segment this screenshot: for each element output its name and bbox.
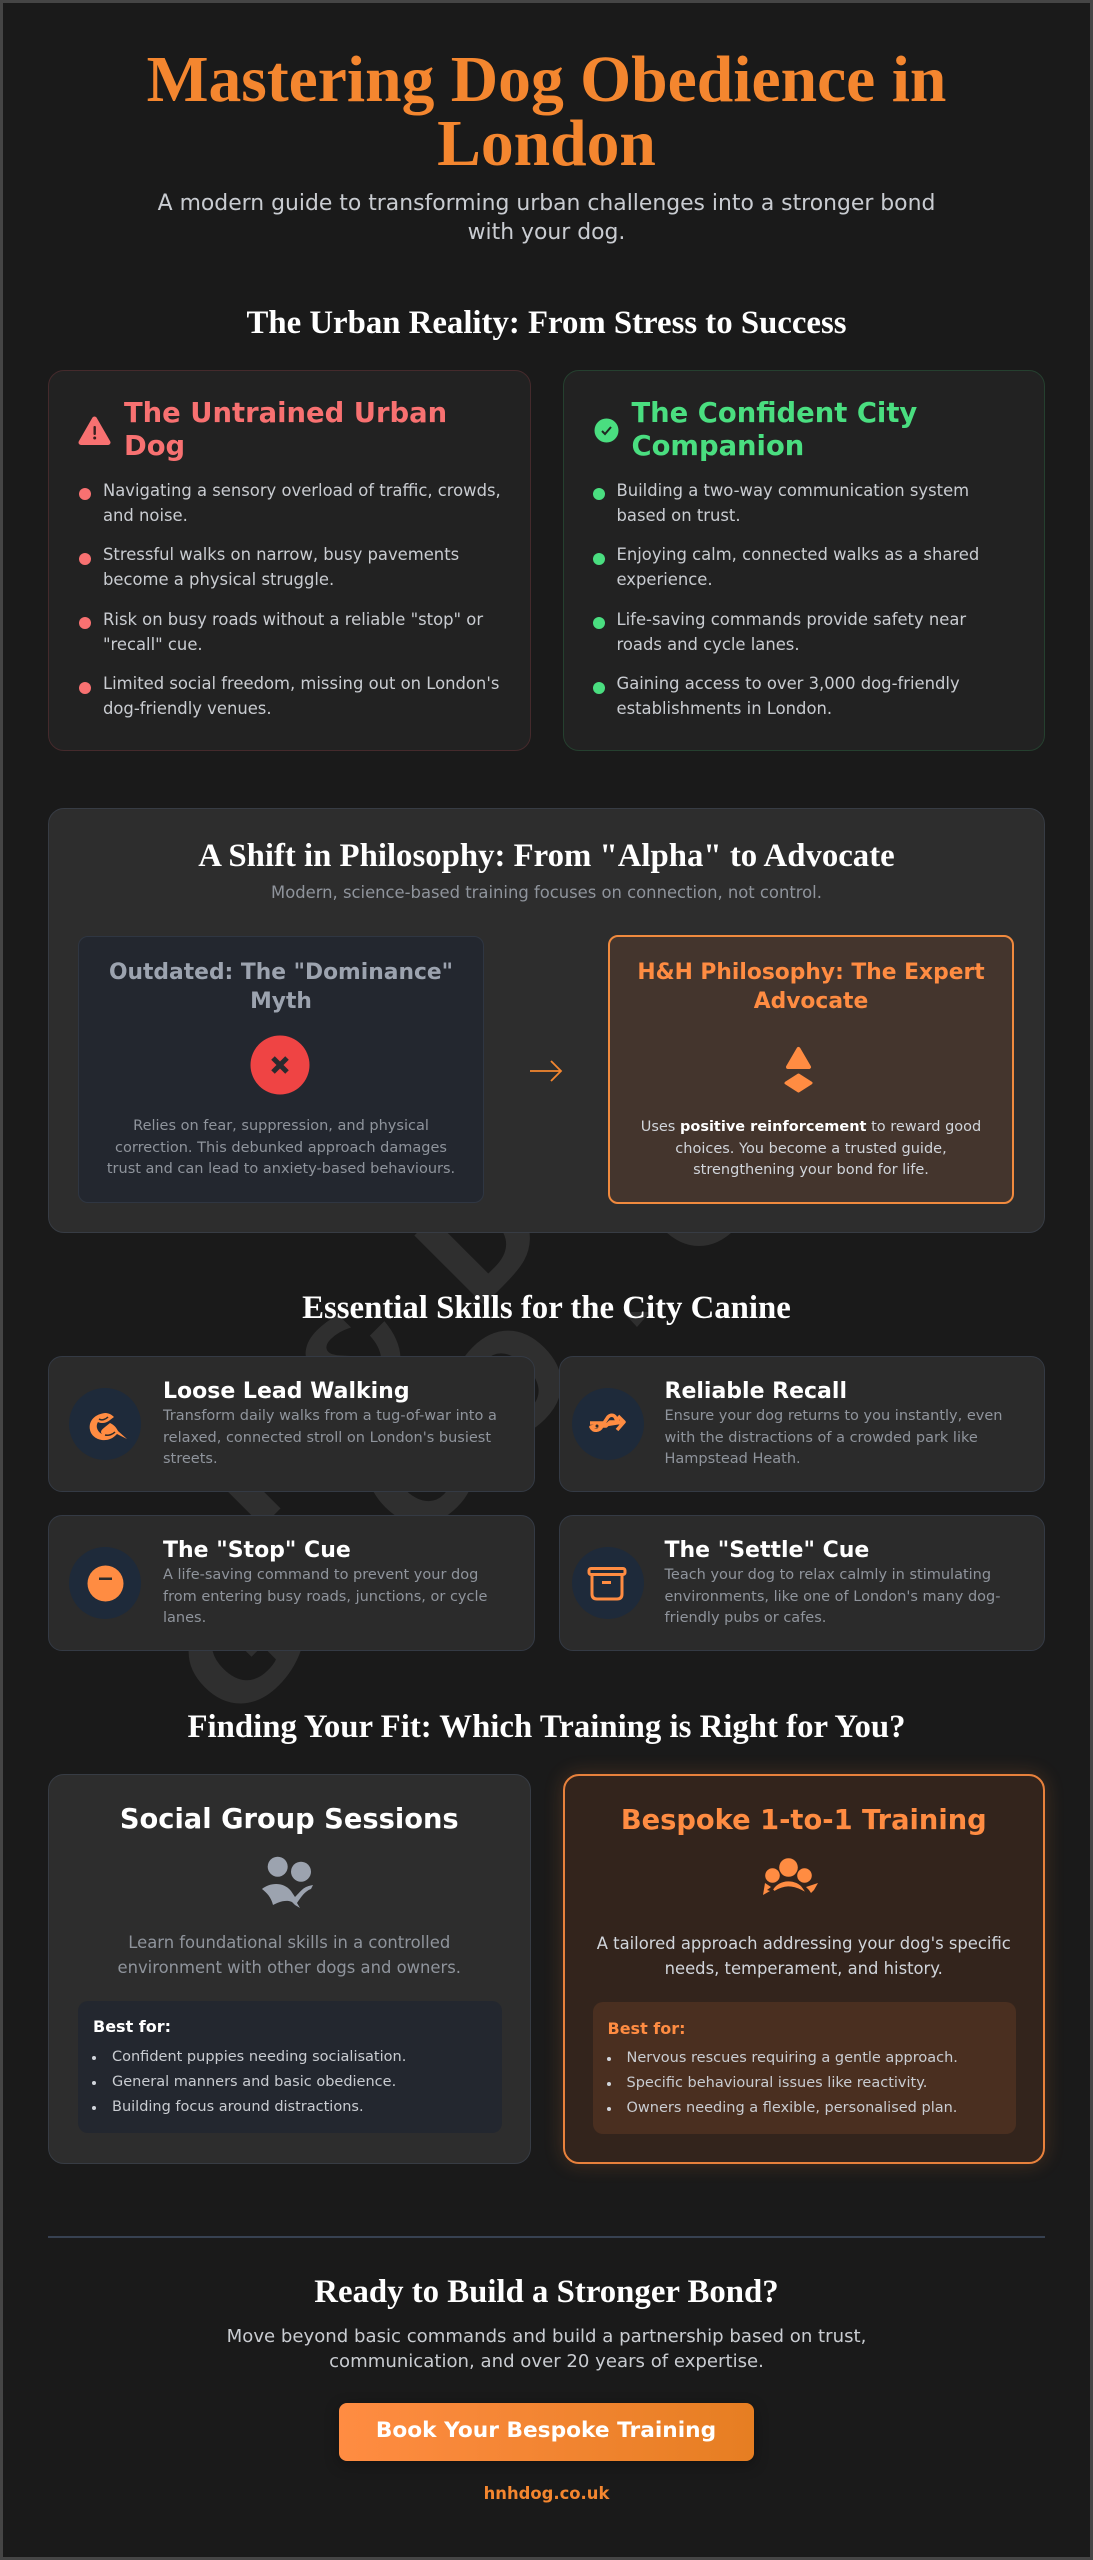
box text: trust and can lead to anxiety-based behaviours. xyxy=(107,1161,455,1177)
card heading: Companion xyxy=(632,431,804,462)
icon: stop xyxy=(88,1566,124,1602)
skill description: Teach your dog to relax calmly in stimulating xyxy=(664,1567,991,1583)
skill description xyxy=(664,1567,1000,1626)
heading: ready: Ready to Build a Stronger Bond? xyxy=(314,2274,779,2310)
box heading: Myth xyxy=(250,989,312,1014)
subtitle xyxy=(158,191,935,245)
skill description xyxy=(163,1567,487,1626)
skill description: relaxed, connected stroll on London's busiest xyxy=(163,1430,491,1446)
skill name: The "Stop" Cue xyxy=(163,1538,351,1563)
icon circle xyxy=(572,1388,644,1460)
title: Mastering Dog Obedience in xyxy=(147,44,946,116)
skill description: Ensure your dog returns to you instantly, even xyxy=(664,1408,1002,1424)
skill description: lanes. xyxy=(163,1610,206,1626)
bullet xyxy=(606,2082,610,2086)
heading: finding your fit: Finding Your Fit: Which Training is Right for You? xyxy=(187,1709,906,1745)
card heading xyxy=(124,398,447,462)
list text: Navigating a sensory overload of traffic, crowds, xyxy=(103,481,501,500)
watermark: & xyxy=(262,1267,456,1462)
list text xyxy=(103,481,501,525)
icon: check circle xyxy=(594,418,618,442)
box heading: H&H Philosophy: The Expert xyxy=(637,960,985,985)
icon circle xyxy=(69,1388,141,1460)
list text: Building a two-way communication system xyxy=(616,481,969,500)
skill name: The "Settle" Cue xyxy=(664,1538,869,1563)
best for label: Best for: xyxy=(93,2017,171,2036)
list item xyxy=(79,553,91,565)
watermark: O xyxy=(327,1377,519,1569)
card: stop cue xyxy=(48,1515,534,1651)
card text: needs, temperament, and history. xyxy=(665,1959,943,1978)
icon: group of dogs xyxy=(262,1856,313,1908)
card heading: The Confident City xyxy=(632,398,917,429)
card text: Learn foundational skills in a controlled xyxy=(128,1933,450,1952)
skill description: streets. xyxy=(163,1451,218,1467)
title xyxy=(147,44,946,180)
panel: untrained dog xyxy=(48,370,530,751)
icon: lead xyxy=(90,1413,127,1440)
list text xyxy=(616,481,969,525)
bullet text: Building focus around distractions. xyxy=(112,2099,364,2115)
box text: choices. You become a trusted guide, xyxy=(675,1141,947,1157)
bullet xyxy=(92,2081,96,2085)
footer divider xyxy=(48,2236,1045,2238)
card text xyxy=(596,1934,1011,1978)
website link: hnhdog.co.uk xyxy=(484,2484,609,2503)
closing text xyxy=(227,2326,866,2372)
skill description: A life-saving command to prevent your dog xyxy=(163,1567,478,1583)
bullet xyxy=(92,2106,96,2110)
heading: skills: Essential Skills for the City Canine xyxy=(302,1290,791,1326)
icon circle xyxy=(69,1547,141,1619)
button: Book Your Bespoke Training xyxy=(376,2418,716,2443)
bullet xyxy=(606,2107,610,2111)
list item xyxy=(592,488,604,500)
best for box xyxy=(78,2001,502,2133)
bullet text: Nervous rescues requiring a gentle approach. xyxy=(626,2050,958,2066)
list text: Risk on busy roads without a reliable "stop" or xyxy=(103,610,483,629)
list text: "recall" cue. xyxy=(103,635,203,654)
box heading: Advocate xyxy=(754,989,868,1014)
watermark: O xyxy=(414,1289,607,1481)
list text: dog-friendly venues. xyxy=(103,699,272,718)
list text xyxy=(103,674,499,718)
list text: Limited social freedom, missing out on London's xyxy=(103,674,499,693)
card heading: Social Group Sessions xyxy=(120,1804,459,1835)
bullet text: Confident puppies needing socialisation. xyxy=(112,2049,406,2065)
list item xyxy=(79,617,91,629)
subtitle: with your dog. xyxy=(468,220,625,245)
title: London xyxy=(437,108,656,180)
list text: establishments in London. xyxy=(616,699,832,718)
bullet text: General manners and basic obedience. xyxy=(112,2074,396,2090)
card: settle cue xyxy=(558,1515,1045,1651)
panel: expert advocate xyxy=(608,935,1014,1204)
list text: based on trust. xyxy=(616,506,741,525)
list text xyxy=(616,610,966,654)
watermark: O xyxy=(605,1099,797,1291)
icon: box xyxy=(588,1567,626,1600)
skill description xyxy=(162,1408,497,1467)
box text: strengthening your bond for life. xyxy=(693,1162,929,1178)
skill description: Transform daily walks from a tug-of-war into a xyxy=(163,1408,497,1424)
watermark: H xyxy=(165,1367,356,1558)
bullet text: Specific behavioural issues like reactivity. xyxy=(626,2075,927,2091)
button xyxy=(338,2403,754,2461)
subtitle: A modern guide to transforming urban challenges into a stronger bond xyxy=(158,191,935,216)
list text: Enjoying calm, connected walks as a shared xyxy=(616,545,979,564)
best for label: Best for: xyxy=(608,2019,686,2038)
panel: confident companion xyxy=(562,370,1045,751)
skill description xyxy=(664,1408,1002,1467)
skill description: Hampstead Heath. xyxy=(664,1451,801,1467)
card heading: The Untrained Urban xyxy=(124,398,447,429)
icon: warning triangle xyxy=(78,416,110,445)
heading: philosophy: A Shift in Philosophy: From "Alpha" to Advocate xyxy=(198,838,895,874)
list text: Gaining access to over 3,000 dog-friendly xyxy=(616,674,960,693)
skill name: Reliable Recall xyxy=(664,1379,847,1404)
panel: philosophy xyxy=(48,808,1045,1233)
list text: Stressful walks on narrow, busy pavements xyxy=(103,545,459,564)
card heading xyxy=(632,398,917,462)
watermark: D xyxy=(387,1146,577,1336)
box text: correction. This debunked approach damages xyxy=(115,1140,447,1156)
list item xyxy=(592,682,604,694)
skill name: Loose Lead Walking xyxy=(163,1379,410,1404)
panel: outdated dominance myth xyxy=(78,936,484,1203)
icon: red cross xyxy=(250,1036,310,1094)
icon: advocate xyxy=(784,1046,813,1092)
closing text: communication, and over 20 years of expertise. xyxy=(329,2351,764,2372)
closing text: Move beyond basic commands and build a partnership based on trust, xyxy=(227,2326,866,2347)
box heading: Outdated: The "Dominance" xyxy=(109,960,453,985)
skill description: environments, like one of London's many dog- xyxy=(664,1589,1000,1605)
list text: become a physical struggle. xyxy=(103,570,334,589)
card text: environment with other dogs and owners. xyxy=(118,1958,461,1977)
list text: experience. xyxy=(616,570,713,589)
list text: roads and cycle lanes. xyxy=(616,635,800,654)
list item xyxy=(592,617,604,629)
box heading xyxy=(637,960,985,1014)
watermark: G xyxy=(146,1560,336,1749)
list item xyxy=(592,553,604,565)
list text xyxy=(616,545,979,589)
list item xyxy=(79,682,91,694)
box text xyxy=(641,1119,981,1178)
bullet text: Owners needing a flexible, personalised plan. xyxy=(626,2100,957,2116)
card heading: Dog xyxy=(124,431,185,462)
panel: bespoke training xyxy=(562,1774,1045,2164)
list text: and noise. xyxy=(103,506,188,525)
list text xyxy=(103,610,484,654)
best for box xyxy=(592,2002,1016,2134)
philosophy subtitle: Modern, science-based training focuses on connection, not control. xyxy=(271,883,822,902)
list text xyxy=(616,674,960,718)
card text: A tailored approach addressing your dog's specific xyxy=(597,1934,1011,1953)
card text xyxy=(118,1933,461,1977)
box text: Uses positive reinforcement to reward good xyxy=(641,1119,981,1135)
list text xyxy=(103,545,459,589)
box heading xyxy=(109,960,453,1014)
box text: Relies on fear, suppression, and physical xyxy=(133,1118,429,1134)
box text xyxy=(107,1118,455,1177)
heading: urban reality: The Urban Reality: From Stress to Success xyxy=(246,305,847,341)
skill description: friendly pubs or cafes. xyxy=(664,1610,826,1626)
bullet xyxy=(606,2057,610,2061)
panel: social group sessions xyxy=(48,1774,530,2164)
card: reliable recall xyxy=(558,1356,1045,1492)
arrow xyxy=(530,1060,562,1082)
skill description: from entering busy roads, junctions, or cycle xyxy=(163,1589,487,1605)
card: loose lead walking xyxy=(48,1356,534,1492)
icon: recall xyxy=(589,1414,626,1432)
list item xyxy=(79,488,91,500)
list text: Life-saving commands provide safety near xyxy=(616,610,966,629)
icon circle xyxy=(572,1547,644,1619)
skill description: with the distractions of a crowded park like xyxy=(664,1430,978,1446)
icon: paw group xyxy=(763,1858,818,1895)
bullet xyxy=(92,2056,96,2060)
card heading: Bespoke 1-to-1 Training xyxy=(621,1805,987,1836)
